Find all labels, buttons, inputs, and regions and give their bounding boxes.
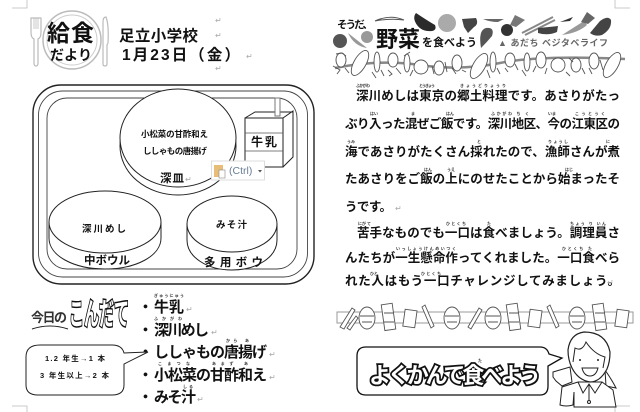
paste options tooltip xyxy=(212,161,264,180)
icon: smiling teacher xyxy=(553,332,616,407)
vegetable heading banner: ▲ あだち ベジタベライフ xyxy=(498,37,608,48)
article paragraph 1: うみ xyxy=(347,138,355,144)
callout: number of fish by grade: 3 年生以上→2 本 xyxy=(40,370,110,380)
menu list: ↵ xyxy=(269,373,276,382)
main bowl xyxy=(49,191,161,269)
vegetable heading banner xyxy=(333,12,611,52)
article paragraph 1: こうとうく xyxy=(575,110,605,116)
article paragraph 2: ひとくち た xyxy=(562,245,592,251)
milk carton: 牛乳 xyxy=(251,134,277,149)
school name and date: 1月23日（金） xyxy=(122,45,240,64)
article paragraph 1: うです。 xyxy=(345,200,392,214)
article paragraph 2: ちょう り いん xyxy=(570,220,606,226)
article paragraph 1: ふかがわ xyxy=(356,82,370,88)
article paragraph 1: はじ xyxy=(565,166,573,172)
article paragraph 1: とうきょう xyxy=(419,82,435,88)
tray diagram xyxy=(33,85,314,284)
article paragraph 2: ↵ xyxy=(607,278,614,287)
school name and date: ↵ xyxy=(215,16,222,25)
menu list: ・ xyxy=(138,367,153,384)
deep plate: ししゃもの唐揚げ xyxy=(143,146,207,156)
menu list: ↵ xyxy=(269,350,276,359)
menu list: ↵ xyxy=(197,395,204,404)
icon: green pepper xyxy=(590,18,611,36)
article paragraph 1: ぶり入った混ぜご飯です。深川地区、今の江東区の xyxy=(345,116,620,131)
article paragraph 2: 苦手なものでも一口は食べましょう。調理員さ xyxy=(357,225,620,240)
menu list: あまず あ xyxy=(212,360,248,366)
menu list: ししゃもの唐揚げ xyxy=(154,344,267,361)
article paragraph 2 xyxy=(345,220,620,288)
article paragraph 1: りょうし xyxy=(548,138,568,144)
article paragraph 1: はん xyxy=(424,166,432,172)
menu list: ・ xyxy=(138,389,153,406)
article paragraph 1: ま xyxy=(411,111,415,116)
icon: carrot xyxy=(562,21,587,35)
deep plate xyxy=(120,89,236,195)
menu list: から あ xyxy=(226,337,249,343)
menu list: ・ xyxy=(138,322,153,339)
icon: bell pepper long xyxy=(538,26,558,34)
article paragraph 1: たあさりをご飯の上にのせたことから始まったそ xyxy=(345,171,620,186)
article paragraph 1 xyxy=(345,82,620,214)
menu list: ↵ xyxy=(186,305,193,314)
article paragraph 2: た xyxy=(487,220,491,226)
article paragraph 2: いっしょうけんめいつく xyxy=(396,245,456,251)
callout: number of fish by grade xyxy=(26,345,148,395)
article paragraph 1: 海であさりがたくさん採れたので、漁師さんが煮 xyxy=(345,144,620,159)
menu list: ↵ xyxy=(211,328,218,337)
school name and date: 足立小学校 xyxy=(119,26,198,45)
vegetable character border xyxy=(333,48,625,81)
multipurpose bowl: 多用ボウ xyxy=(204,255,263,269)
article paragraph 2: ひとくち xyxy=(446,220,466,226)
school name and date: ↵ xyxy=(246,52,253,61)
speech bubble: よくかんで食べよう: た xyxy=(478,357,482,363)
vegetable heading banner: を食べよう xyxy=(422,35,477,49)
article paragraph 1: ふかがわ ち く xyxy=(491,110,529,116)
menu list: 深川めし xyxy=(154,322,209,339)
speech bubble: よくかんで食べよう: よくかんで食べよう xyxy=(369,363,541,388)
article paragraph 1: に xyxy=(606,139,610,144)
multipurpose bowl xyxy=(187,196,277,270)
school name and date: ↵ xyxy=(215,31,222,40)
main bowl: 中ボウル xyxy=(84,253,130,267)
tableware character border xyxy=(337,303,633,331)
text: こんだて xyxy=(69,297,129,332)
school name and date: ↵ xyxy=(215,64,222,73)
icon: beetroot xyxy=(501,24,513,36)
menu list: みそ汁 xyxy=(154,389,196,406)
icon: spinach xyxy=(480,28,493,48)
paste options tooltip: (Ctrl) xyxy=(229,165,252,177)
multipurpose bowl: みそ汁 xyxy=(216,219,247,231)
menu list: 小松菜の甘酢和え xyxy=(154,366,267,384)
article paragraph 2: んたちが一生懸命作ってくれました。一口食べら xyxy=(345,250,620,265)
article paragraph 2: れた人はもう一口チャレンジしてみましょう。 xyxy=(345,274,620,288)
icon: eggplant xyxy=(414,13,436,31)
title logo: 給食だより: 給食 xyxy=(47,20,94,46)
icon: onion xyxy=(438,14,456,32)
article paragraph 1: きょうどりょうり xyxy=(460,82,506,88)
menu list: ぎゅうにゅう xyxy=(154,292,184,298)
article paragraph 2: ひと xyxy=(370,270,378,276)
speech bubble: よくかんで食べよう xyxy=(357,347,562,395)
article paragraph 1: はい xyxy=(370,111,378,116)
menu heading logo: 今日のこんだて: 今日の xyxy=(31,310,67,325)
article paragraph 2: ひとくち xyxy=(421,270,441,276)
menu list: ふかがわ xyxy=(154,315,182,321)
deep plate: 深皿 xyxy=(160,171,184,185)
icon: mushroom xyxy=(462,18,477,33)
deep plate: 小松菜の甘酢和え xyxy=(141,129,208,139)
icon: long beans xyxy=(522,17,555,35)
menu list: こまつな xyxy=(158,360,190,366)
title logo: 給食だより xyxy=(31,11,108,69)
menu heading logo: 今日のこんだて xyxy=(31,297,129,332)
callout: number of fish by grade: 1.2 年生→1 本 xyxy=(45,353,106,363)
menu list: 牛乳 xyxy=(154,299,184,316)
menu list: しる xyxy=(183,383,193,389)
icon: small pod xyxy=(560,17,573,22)
article paragraph 1: ↵ xyxy=(395,204,402,213)
article paragraph 1: うえ xyxy=(447,166,455,172)
article paragraph 1: いま xyxy=(548,111,556,116)
deep plate: ↵ xyxy=(185,175,192,184)
menu list: ・ xyxy=(138,344,153,361)
main bowl: 深川めし xyxy=(82,223,126,235)
icon: okra xyxy=(348,33,367,48)
title logo: 給食だより: だより xyxy=(50,47,92,63)
milk carton xyxy=(245,98,293,167)
menu list xyxy=(138,292,276,406)
article paragraph 1: はん xyxy=(446,110,454,116)
article paragraph 2: にが て xyxy=(358,220,371,226)
school name and date xyxy=(119,16,253,73)
icon: tomato xyxy=(333,34,347,48)
vegetable heading banner: 野菜 xyxy=(376,27,420,52)
article paragraph 1: と xyxy=(477,138,481,144)
icon: lotus root xyxy=(361,31,373,43)
vegetable heading banner: そうだ、 xyxy=(337,19,373,31)
icon: green beans xyxy=(483,19,504,22)
menu list: ・ xyxy=(138,299,153,316)
article paragraph 1: 深川めしは東京の郷土料理です。あさりがたっ xyxy=(356,88,620,103)
